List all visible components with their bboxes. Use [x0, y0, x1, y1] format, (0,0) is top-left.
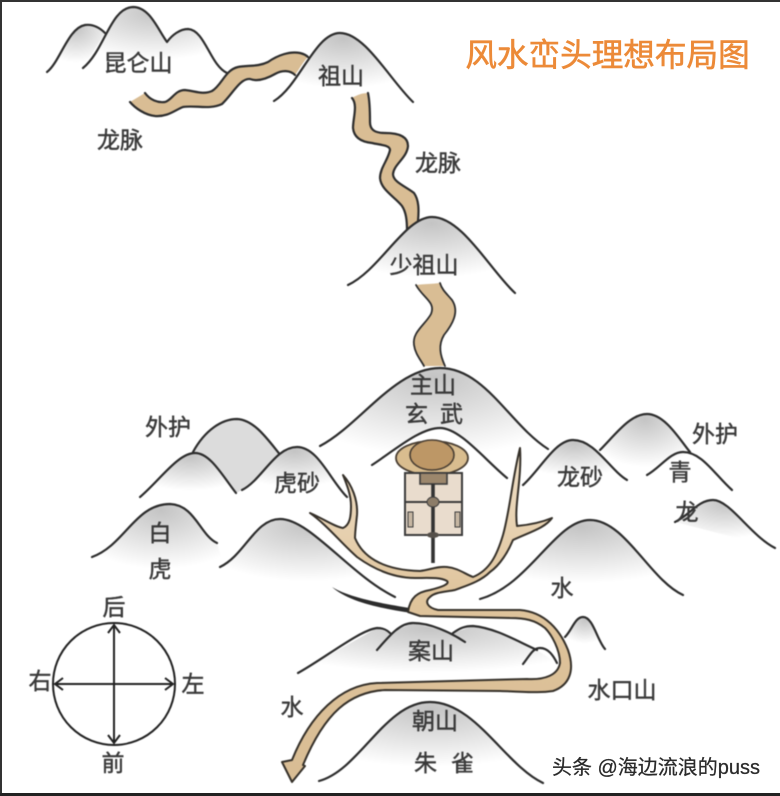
mountain: 祖山: 祖山: [318, 63, 364, 89]
compass: directions: 后: [102, 594, 126, 620]
dragon vein: 祖山 to 少祖山: [352, 93, 419, 231]
compass: directions: [28, 594, 204, 776]
mountain: 祖山: [274, 33, 413, 102]
mountain: 少祖山: [348, 217, 515, 293]
river: main dragon water system: [282, 448, 571, 782]
mountain: 龙砂: [523, 440, 627, 490]
compass: directions: 前: [102, 750, 124, 776]
mountain: 朝山 朱雀: 朱 雀: [414, 750, 474, 776]
mountain: 水 right: 水: [550, 575, 574, 601]
mountain: 案山: [298, 623, 560, 685]
mountain: 青 ridge: 青: [668, 459, 692, 485]
label: 外护 left: 外护: [145, 414, 191, 440]
mountain: 虎砂: [242, 447, 347, 497]
compass: directions: 左: [182, 671, 204, 697]
label: 水 left: 水: [280, 694, 304, 720]
mountain: 主山 玄武: [320, 368, 548, 478]
mountain: 朝山 朱雀: 朝山: [412, 708, 458, 734]
mountain: 青龙 lower: 龙: [676, 499, 698, 525]
mountain: 案山: 案山: [408, 638, 454, 664]
mountain: 外护 left: [193, 419, 282, 493]
mountain: 主山 玄武: 玄 武: [405, 401, 463, 427]
mountain: 水 right: [480, 520, 683, 601]
mountain: 少祖山: 少祖山: [390, 252, 458, 278]
label: 龙脉 right: 龙脉: [415, 150, 461, 176]
title: 风水峦头理想布局图: [465, 37, 750, 73]
dragon vein: 昆仑 to 祖山: [130, 52, 308, 116]
label: 外护 right: 外护: [692, 421, 738, 447]
watermark: 头条 @海边流浪的puss: [552, 756, 760, 779]
mountain: 外护 right: [600, 414, 690, 480]
mountain: 龙砂: 龙砂: [557, 464, 603, 490]
label: 水口山: 水口山: [588, 677, 656, 703]
mountain: 青 ridge: [647, 452, 732, 490]
compass: directions: 右: [28, 668, 52, 694]
mountain: 白虎: [92, 504, 230, 585]
mountain: 水口山: [565, 617, 605, 650]
label: 龙脉: 龙脉: [97, 127, 143, 153]
mountain: 虎砂: 虎砂: [274, 470, 320, 496]
mountain: 白虎: 虎: [148, 556, 172, 582]
mountain: lower left: [220, 519, 395, 597]
building: central residence: [396, 440, 468, 563]
mountain: 朝山 朱雀: [319, 702, 543, 783]
mountain: 主山 玄武: 主山: [410, 372, 456, 398]
mountain: 青龙 lower: [675, 499, 775, 548]
mountain: 昆仑山: [47, 7, 227, 76]
mountain: left ridge: [140, 453, 240, 500]
mountain: 白虎: 白: [148, 520, 172, 546]
mountain: 昆仑山: 昆仑山: [104, 50, 172, 76]
dragon vein: 少祖山 to 主山: [414, 283, 455, 366]
